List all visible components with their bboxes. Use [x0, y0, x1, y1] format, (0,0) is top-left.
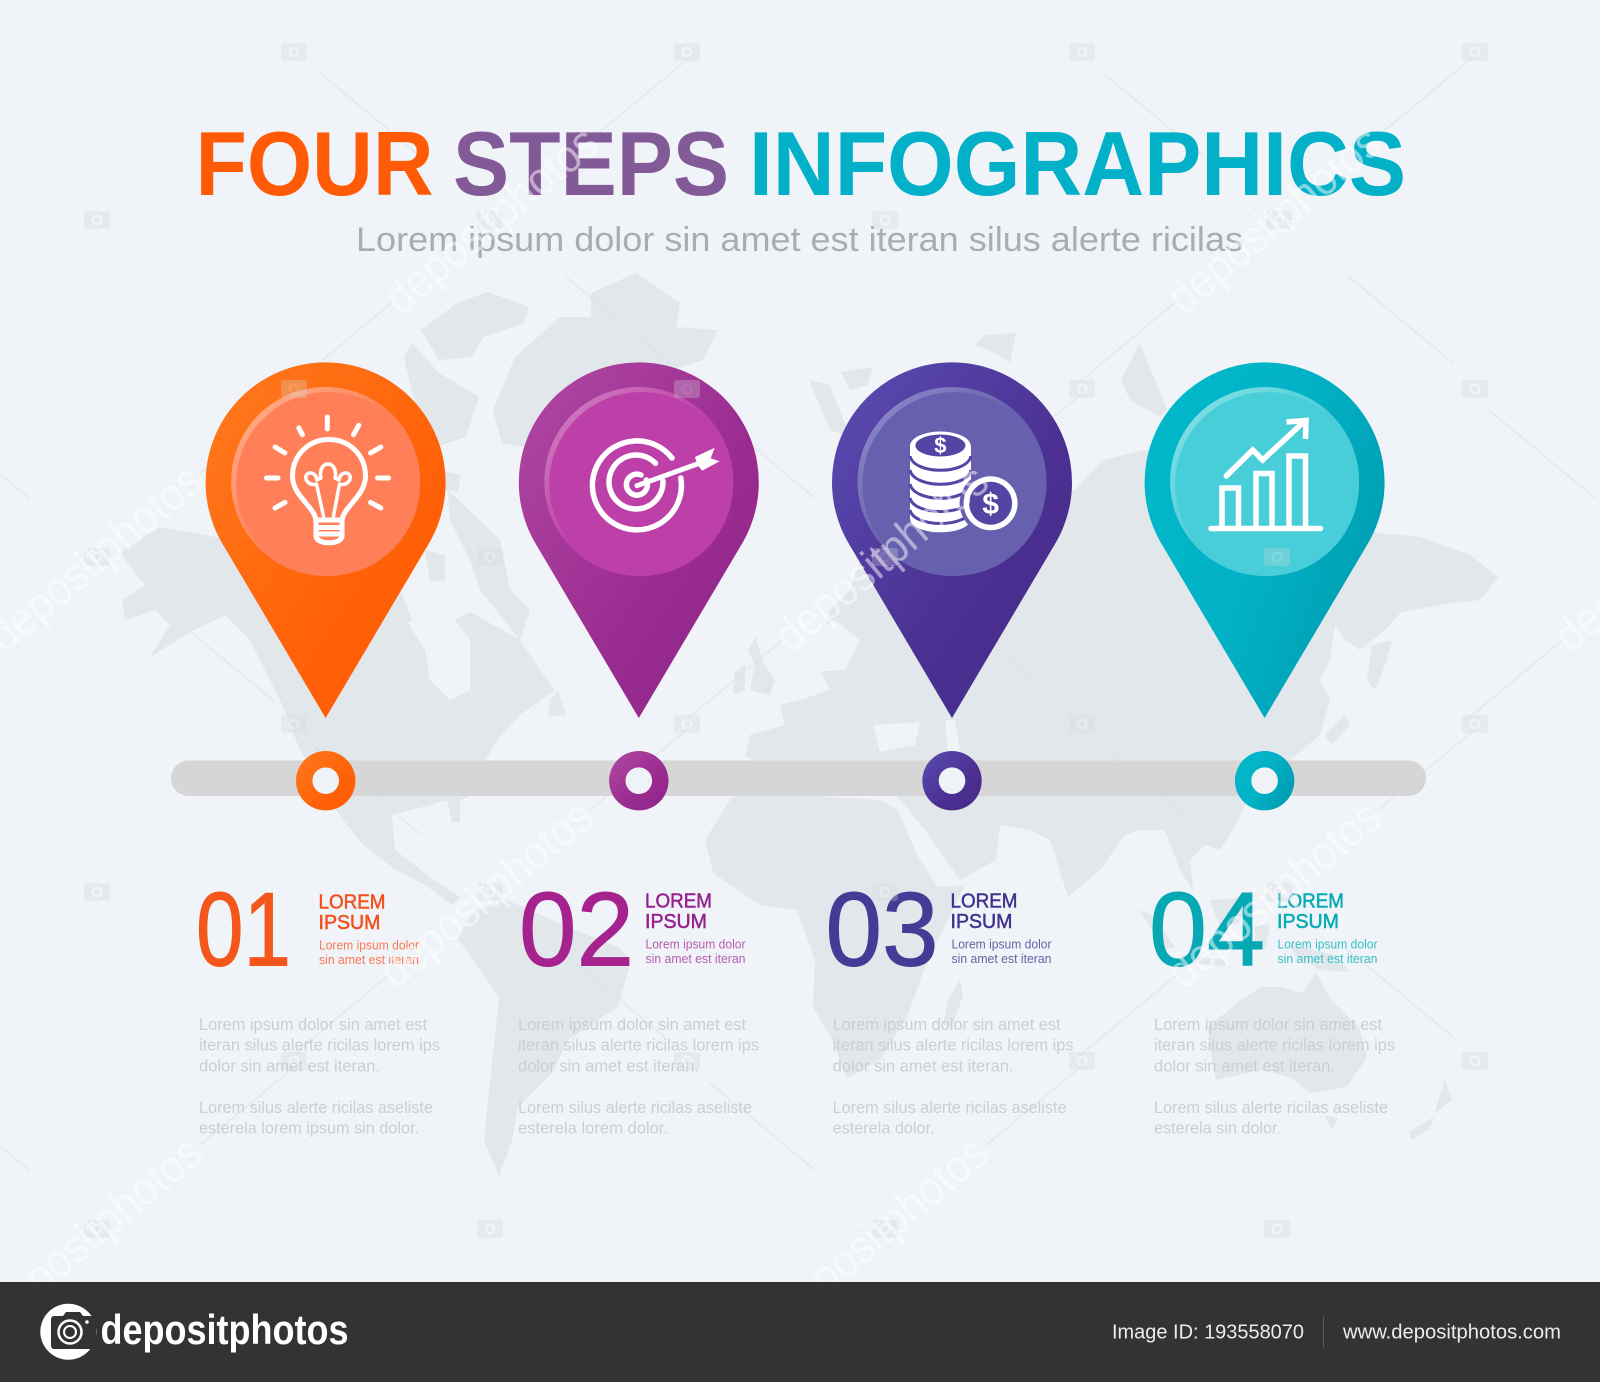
footer logo icon — [40, 1304, 96, 1360]
step 2 heading — [645, 890, 712, 933]
step 2 text block — [518, 872, 759, 1137]
pin 2: purple — [519, 362, 759, 718]
step 3 body: dolor sin amet est iteran. — [833, 1058, 1014, 1076]
map: Eurasia — [745, 450, 1498, 897]
map: Greenland — [493, 273, 718, 447]
step 4 caption: Lorem ipsum dolor — [1278, 938, 1378, 952]
step 3 body: Lorem ipsum dolor sin amet est — [833, 1016, 1061, 1034]
step 3 body: iteran silus alerte ricilas lorem ips — [833, 1037, 1074, 1055]
subtitle: Lorem ipsum dolor sin amet est iteran silus alerte ricilas — [356, 221, 1243, 259]
icon text: dollar on stack: $ — [934, 433, 947, 458]
map: South America — [457, 900, 631, 1177]
title word: INFOGRAPHICS: INFOGRAPHICS — [749, 114, 1406, 215]
step 1 body — [199, 1016, 440, 1137]
step number 04: 04 — [1149, 872, 1265, 988]
map: Madagascar — [943, 980, 963, 1027]
step 4 heading — [1277, 890, 1344, 933]
step 3 body: esterela dolor. — [833, 1119, 935, 1137]
step 2 heading: LOREM — [645, 890, 712, 912]
step number 03: 03 — [826, 872, 938, 988]
step 2 body — [518, 1016, 759, 1137]
map: Africa — [705, 790, 965, 1078]
footer bar — [0, 1282, 1600, 1382]
step 4 body: dolor sin amet est iteran. — [1154, 1058, 1335, 1076]
step 3 body: Lorem silus alerte ricilas aseliste — [833, 1099, 1067, 1117]
step 2 body: Lorem ipsum dolor sin amet est — [518, 1016, 746, 1034]
depositphotos diagonal watermarks: depositphotos — [1157, 790, 1391, 998]
step 4 body — [1154, 1016, 1395, 1137]
map: Australia — [1208, 973, 1367, 1130]
depositphotos diagonal watermarks: depositphotos — [374, 116, 608, 324]
title — [196, 114, 1406, 215]
step 3 heading — [950, 890, 1018, 933]
timeline marker 3 — [922, 751, 982, 810]
pin 1: orange — [206, 362, 446, 718]
step 4 text block — [1149, 872, 1395, 1137]
pin 4: teal — [1145, 362, 1385, 718]
map: New Zealand — [1409, 1080, 1452, 1140]
step 1 heading: IPSUM — [318, 911, 380, 934]
step 2 body: esterela lorem dolor. — [518, 1119, 668, 1137]
step 2 body: Lorem silus alerte ricilas aseliste — [518, 1099, 752, 1117]
icon: rising bar chart — [1211, 420, 1320, 528]
step 3 caption: Lorem ipsum dolor — [952, 938, 1052, 952]
step 2 caption — [646, 938, 746, 966]
step 1 text block — [196, 872, 440, 1137]
step 1 caption: Lorem ipsum dolor — [319, 938, 419, 952]
footer separator — [1323, 1316, 1324, 1348]
map: British Isles — [733, 637, 775, 695]
step 4 body: iteran silus alerte ricilas lorem ips — [1154, 1037, 1395, 1055]
step 3 text block — [826, 872, 1074, 1137]
step 3 heading: LOREM — [950, 890, 1018, 912]
step 3 body — [833, 1016, 1074, 1137]
step 1 body: Lorem ipsum dolor sin amet est — [199, 1016, 427, 1034]
depositphotos diagonal watermarks: depositphotos — [764, 1126, 998, 1334]
title word: FOUR: FOUR — [196, 114, 434, 215]
step 3 caption — [952, 938, 1052, 966]
map: Arctic islands — [404, 292, 566, 716]
step 4 body: Lorem silus alerte ricilas aseliste — [1154, 1099, 1388, 1117]
step 4 body: esterela sin dolor. — [1154, 1119, 1281, 1137]
step 1 body: Lorem silus alerte ricilas aseliste — [199, 1099, 433, 1117]
step 2 caption: Lorem ipsum dolor — [646, 938, 746, 952]
map: northern Eurasia islands — [809, 333, 1392, 745]
step 3 caption: sin amet est iteran — [952, 952, 1052, 966]
small camera watermark icons — [84, 43, 1488, 1238]
step 1 body: dolor sin amet est iteran. — [199, 1058, 380, 1076]
timeline marker 4 — [1235, 751, 1294, 810]
step 1 caption: sin amet est iteran — [319, 953, 419, 967]
step 4 heading: IPSUM — [1277, 910, 1339, 933]
icon text: dollar on coin: $ — [982, 488, 999, 521]
map: Indonesia — [1139, 898, 1350, 972]
step 3 heading: IPSUM — [950, 910, 1012, 933]
world map background — [120, 273, 1498, 1177]
step 2 body: dolor sin amet est iteran. — [518, 1058, 699, 1076]
icon: light bulb — [266, 417, 389, 543]
step 1 heading — [318, 890, 386, 934]
step 1 heading: LOREM — [318, 890, 386, 914]
footer image id: Image ID: 193558070 — [1112, 1322, 1304, 1344]
step 1 body: iteran silus alerte ricilas lorem ips — [199, 1037, 440, 1055]
pin 3: indigo — [832, 362, 1072, 718]
timeline bar — [171, 760, 1426, 796]
step 4 body: Lorem ipsum dolor sin amet est — [1154, 1016, 1382, 1034]
step number 01: 01 — [196, 872, 291, 988]
footer url: www.depositphotos.com — [1342, 1322, 1561, 1344]
step 1 caption — [319, 938, 419, 967]
depositphotos diagonal watermarks: depositphotos — [764, 454, 998, 662]
icon: coin stack — [910, 432, 1022, 534]
step 2 body: iteran silus alerte ricilas lorem ips — [518, 1037, 759, 1055]
depositphotos diagonal watermarks: depositphotos — [369, 790, 603, 998]
title word: STEPS: STEPS — [453, 114, 729, 215]
step 2 caption: sin amet est iteran — [646, 952, 746, 966]
depositphotos diagonal watermarks: depositphotos — [1157, 116, 1391, 324]
timeline marker 2 — [609, 751, 668, 810]
step 4 caption — [1278, 938, 1378, 966]
map: North America — [120, 527, 555, 905]
step 4 caption: sin amet est iteran — [1278, 952, 1378, 966]
step number 02: 02 — [519, 872, 634, 988]
timeline marker 1 — [296, 751, 355, 810]
step 2 heading: IPSUM — [645, 910, 707, 933]
step 1 body: esterela lorem ipsum sin dolor. — [199, 1119, 419, 1137]
step 4 heading: LOREM — [1277, 890, 1344, 912]
map: inland seas — [780, 620, 960, 795]
icon: target with arrow — [592, 441, 720, 530]
footer wordmark: depositphotos — [100, 1306, 348, 1353]
